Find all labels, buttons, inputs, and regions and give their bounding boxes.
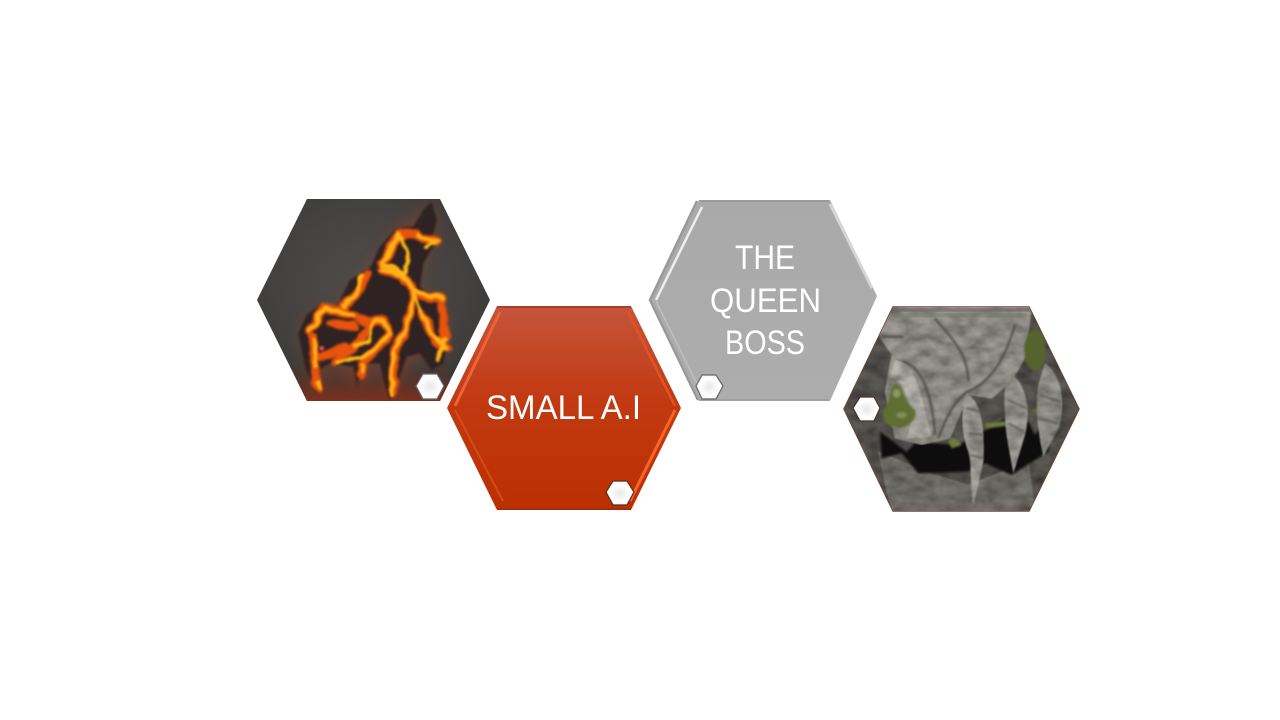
label: the queen boss: QUEEN (710, 282, 821, 320)
badge: lava hexagon marker (416, 374, 444, 399)
badge: small A.I marker (606, 481, 634, 505)
badge: stone queen marker (853, 397, 880, 421)
bevel highlights (650, 201, 872, 400)
honeycomb infographic (257, 199, 1080, 512)
label: the queen boss: THE (735, 239, 795, 277)
green sacs (883, 329, 1046, 448)
badge: queen boss marker (696, 375, 723, 399)
panel: lava creature hexagon (250, 195, 495, 405)
image: stone queen creature (835, 305, 1085, 515)
label: the queen boss (710, 239, 821, 362)
image: lava spider creature (298, 202, 447, 400)
stone legs (962, 363, 1062, 505)
panel: queen boss hexagon (649, 200, 877, 401)
panel: small A.I hexagon (447, 306, 681, 510)
bevel highlights (455, 307, 675, 509)
label: small A.I: SMALL A.I (486, 389, 641, 427)
label: the queen boss: BOSS (725, 324, 805, 362)
panel: stone queen hexagon (835, 305, 1085, 515)
